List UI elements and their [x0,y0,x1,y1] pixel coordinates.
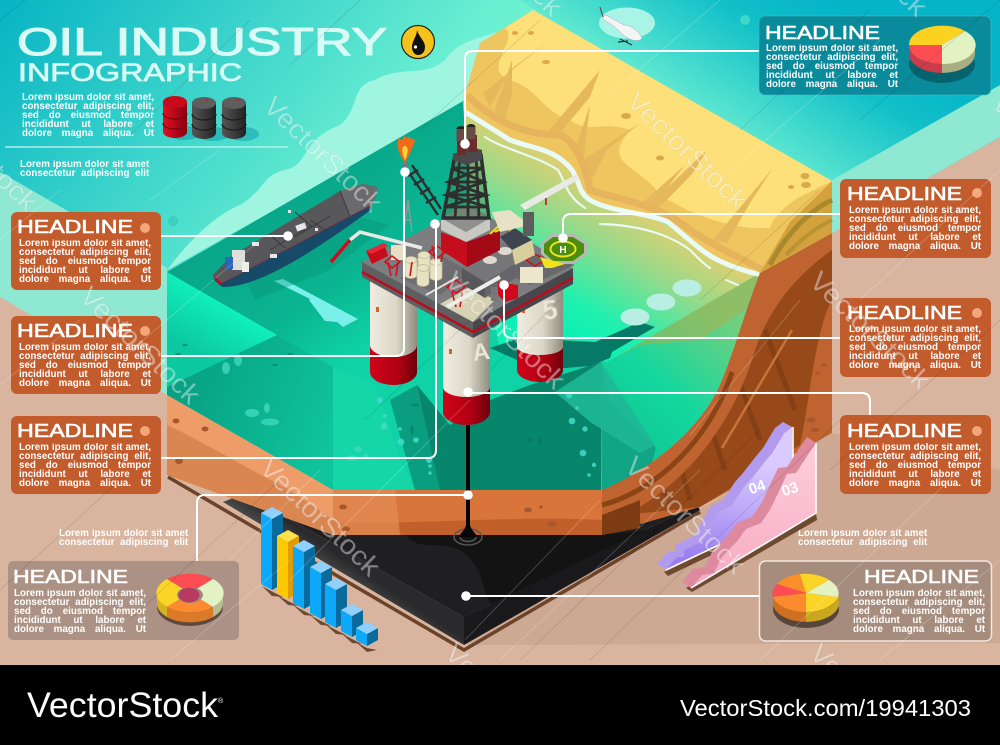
panel: headline right 2: sed do eiusmod tempor [849,342,981,353]
panel: headline right 3: dolore magna aliqua. Ut [849,478,981,489]
bar 2 [277,530,299,599]
panel: bottom left donut: incididunt ut labore et [14,615,146,626]
bar 6 [341,604,363,637]
column middle [443,320,492,425]
panel: bottom right pie: sed do eiusmod tempor [853,606,985,617]
panel: headline right 3 [840,415,991,494]
watermarks: VectorStock [621,86,754,215]
watermarks: VectorStock [439,266,572,395]
red lifeboat frames [385,246,545,307]
icon: red barrel [163,96,187,138]
panel: bottom right pie: HEADLINE [864,567,979,587]
panel: headline right 1: sed do eiusmod tempor [849,223,981,234]
footer logo: VectorStock [27,686,219,725]
panel: headline right 3: HEADLINE [847,421,962,441]
white pipe boom [331,232,422,262]
iso area chart: 03 [682,437,817,592]
panel: headline right 1: consectetur adipiscing elit, [849,214,981,225]
grid deck [500,228,532,250]
leader lines [161,51,870,596]
column right [517,278,563,382]
watermarks: VectorStock [258,91,388,218]
panel: bottom left donut: HEADLINE [13,567,128,587]
flare boom [405,165,441,215]
panel: headline right 2: consectetur adipiscing elit, [849,333,981,344]
column left [370,275,417,385]
crown block [453,146,482,165]
panel: headline left 1: incididunt ut labore et [19,265,151,276]
intro text: sed do eiusmod tempor [22,110,154,121]
panel: bottom left donut [8,561,239,640]
watermarks: VectorStock [804,266,937,395]
donut chart [156,574,224,626]
panel: headline left 2: consectetur adipiscing elit, [19,351,151,362]
iso area chart: 04: 04 [747,477,768,498]
panel: top right pie: HEADLINE [765,23,880,43]
water body [167,100,760,490]
panel: top right pie [759,16,991,95]
icon: oil drop badge [402,26,434,58]
panel: bottom right pie: consectetur adipiscing elit, [853,597,985,608]
panel: bottom left donut: sed do eiusmod tempor [14,606,146,617]
bar 1 [261,507,283,590]
panel: top right pie: dolore magna aliqua. Ut [766,79,898,90]
bottom left caption: consectetur adipiscing elit [59,537,188,548]
rig shadow on water [490,322,655,370]
watermarks: VectorStock [619,451,752,580]
column right: 5 [540,294,560,326]
panel: bottom left donut: dolore magna aliqua. Ut [14,624,146,635]
panel: bottom right pie: dolore magna aliqua. Ut [853,624,985,635]
derrick tower [443,155,489,218]
leader dots [283,139,568,601]
bar 5 [325,578,347,628]
white truss box [441,218,490,242]
panel: headline right 1: HEADLINE [847,184,962,204]
panel: headline left 3: sed do eiusmod tempor [19,460,151,471]
yellow crane [490,218,512,234]
footer bar: ® [218,697,224,705]
bottom left caption [59,528,199,548]
bar 4 [310,561,332,619]
panel: headline left 1: dolore magna aliqua. Ut [19,274,151,285]
panel: headline left 1: sed do eiusmod tempor [19,256,151,267]
panel: headline left 2: dolore magna aliqua. Ut [19,378,151,389]
panel: headline right 2 [840,298,991,377]
pie chart [909,26,976,83]
intro text [22,92,162,140]
panel: headline left 2 [11,316,161,394]
helideck: H [559,245,567,256]
iso area chart: 03: 03 [780,479,801,500]
panel: headline left 1: HEADLINE [17,217,133,237]
panel: headline right 3: sed do eiusmod tempor [849,460,981,471]
panel: top right pie: sed do eiusmod tempor [766,61,898,72]
panel: headline right 2: incididunt ut labore et [849,351,981,362]
earth strata [167,233,832,535]
subtitle text [20,160,160,180]
right crane [520,174,578,236]
column middle: A [471,338,492,367]
panel: headline left 1 [11,212,161,290]
bar chart [261,507,378,652]
tanks [405,252,442,286]
shoreline foam [467,113,757,285]
panel: headline left 3 [11,416,161,494]
decorative dots [168,15,750,226]
icon: dark barrel [192,97,216,139]
flare flame [398,135,415,163]
oil platform [331,124,587,425]
red container [366,243,388,264]
title [17,21,387,87]
deck [362,262,473,338]
underwater details [175,344,596,477]
panel: bottom left donut: consectetur adipiscing elit, [14,597,146,608]
title: INFOGRAPHIC [18,59,242,87]
red box [498,282,518,302]
pie chart [772,574,839,628]
intro text: dolore magna aliqua. Ut [22,128,154,139]
shallow ovals [620,280,702,326]
bar 7 [356,622,378,646]
panel: headline left 2: sed do eiusmod tempor [19,360,151,371]
panel: headline left 3: consectetur adipiscing elit, [19,451,151,462]
panel: headline left 1: consectetur adipiscing elit, [19,247,151,258]
panel: top right pie: consectetur adipiscing elit, [766,52,898,63]
helicopter [599,7,655,45]
lower grey structure [462,242,525,282]
bar 3 [293,540,315,609]
panel: top right pie: incididunt ut labore et [766,70,898,81]
direction arrow on water [274,279,358,327]
panel: headline right 1: dolore magna aliqua. Ut [849,241,981,252]
intro text: incididunt ut labore et [22,119,154,130]
watermarks: VectorStock [74,281,207,410]
watermarks: VectorStock [254,453,387,582]
oil riser and wellhead [454,425,482,545]
icon: dark barrel 2 [222,97,246,139]
bottom right caption [798,528,938,548]
iso area chart: 04 [657,422,793,576]
oil reservoir layer [223,496,700,645]
bottom right caption: consectetur adipiscing elit [798,537,927,548]
helideck [540,234,587,268]
panel: headline right 3: incididunt ut labore et [849,469,981,480]
panel: headline left 3: dolore magna aliqua. Ut [19,478,151,489]
footer bar [0,665,1000,745]
panel: headline right 2: dolore magna aliqua. Ut [849,360,981,371]
title: OIL INDUSTRY [17,21,387,64]
panel: headline left 3: incididunt ut labore et [19,469,151,480]
panel: bottom right pie [760,561,992,641]
footer url: VectorStock.com/19941303 [680,695,971,721]
panel: headline right 3: consectetur adipiscing elit, [849,451,981,462]
second boom [447,277,500,307]
panel: headline left 2: incididunt ut labore et [19,369,151,380]
panel: headline right 1: incididunt ut labore et [849,232,981,243]
panel: headline right 2: HEADLINE [847,303,962,323]
panel: headline left 2: HEADLINE [17,321,133,341]
small lattice mast [404,200,412,232]
derrick base red [441,232,467,267]
soil speckles [172,363,826,532]
intro text: consectetur adipiscing elit, [22,101,154,112]
panel: bottom right pie: incididunt ut labore et [853,615,985,626]
floor shadow [168,477,700,650]
barrels [163,96,259,141]
panel: headline right 1 [840,179,991,258]
panel: headline left 3: HEADLINE [17,421,133,441]
sand beach [463,10,832,273]
subtitle text: consectetur adipiscing elit [20,168,149,179]
oil tanker [213,184,390,300]
